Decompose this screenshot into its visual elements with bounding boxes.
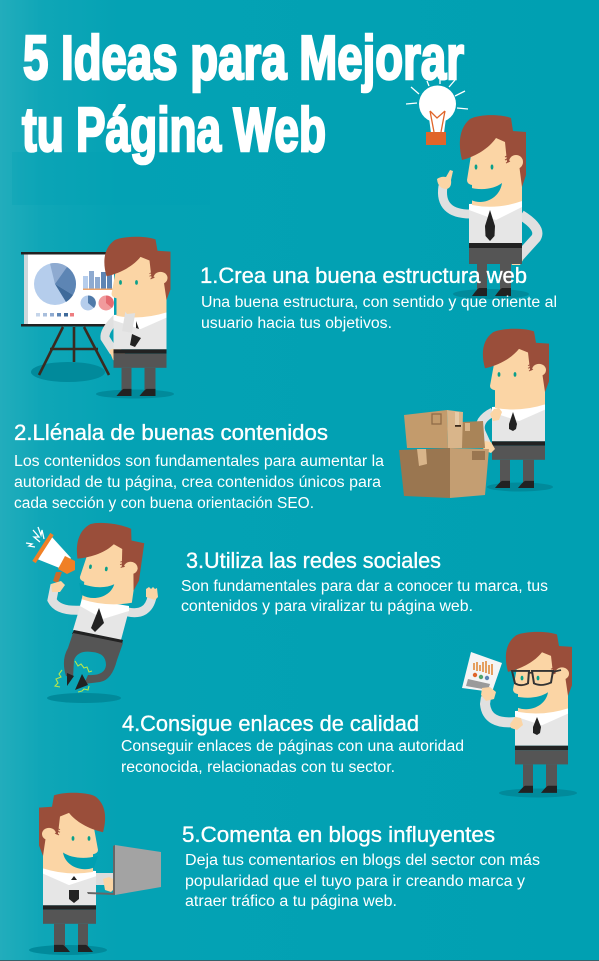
character: reading with glasses xyxy=(481,632,577,798)
step 5 text: Deja tus comentarios en blogs del sector con más xyxy=(185,852,540,869)
step 3 text: contenidos y para viralizar tu página web. xyxy=(181,598,473,615)
step 5 text: 5.Comenta en blogs influyentes xyxy=(182,822,495,847)
step 3 text: Son fundamentales para dar a conocer tu marca, tus xyxy=(181,578,548,595)
step 3 text: 3.Utiliza las redes sociales xyxy=(186,548,441,573)
step 3 text xyxy=(181,548,548,615)
icon: cardboard boxes xyxy=(399,410,489,498)
pie chart xyxy=(34,263,76,305)
title xyxy=(22,24,464,165)
step 1 text xyxy=(200,263,557,332)
character: boxes xyxy=(480,329,553,492)
icon: laptop xyxy=(87,845,161,895)
step 2 text: cada sección y con buena orientación SEO. xyxy=(14,495,314,512)
legend squares xyxy=(36,313,74,316)
icon: megaphone xyxy=(26,527,75,583)
step 5 text xyxy=(182,822,540,910)
character: idea xyxy=(437,115,537,299)
step 4 text xyxy=(121,711,464,776)
step 2 text xyxy=(14,420,384,512)
character: laptop user xyxy=(29,793,115,955)
step 4 text: reconocida, relacionadas con tu sector. xyxy=(121,759,395,776)
title: tu Página Web xyxy=(22,96,326,165)
step 4 text: 4.Consigue enlaces de calidad xyxy=(122,711,419,736)
step 5 text: atraer tráfico a tu página web. xyxy=(185,893,397,910)
glasses xyxy=(512,670,561,685)
icon: report sheet xyxy=(462,652,502,692)
step 1 text: Una buena estructura, con sentido y que oriente al xyxy=(201,294,557,311)
step 1 text: usuario hacia tus objetivos. xyxy=(201,315,392,332)
step 1 text: 1.Crea una buena estructura web xyxy=(200,263,527,288)
bar chart xyxy=(83,266,113,290)
step 2 text: 2.Llénala de buenas contenidos xyxy=(14,420,328,445)
step 4 text: Conseguir enlaces de páginas con una autoridad xyxy=(121,738,464,755)
character: presenter xyxy=(96,237,174,398)
small pies xyxy=(80,295,114,310)
step 2 text: Los contenidos son fundamentales para aumentar la xyxy=(14,453,384,470)
step 5 text: popularidad que el tuyo para ir creando marca y xyxy=(185,873,525,890)
chart board with easel xyxy=(21,252,114,382)
character: jumping xyxy=(47,519,158,703)
icon: light bulb xyxy=(406,80,468,145)
step 2 text: autoridad de tu página, crea contenidos únicos para xyxy=(14,474,381,491)
